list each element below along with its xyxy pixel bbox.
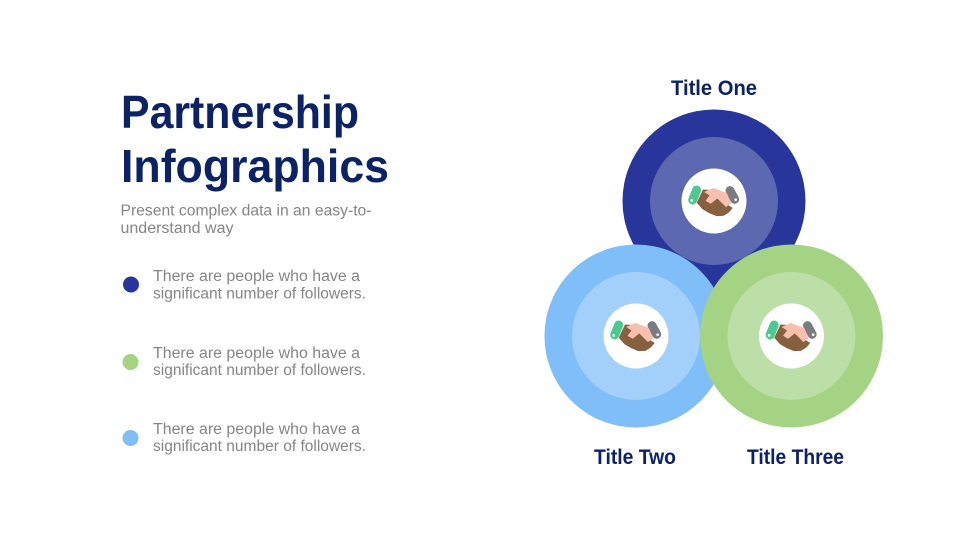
legend item: light blue: [122, 421, 366, 455]
circle two: light blue: [544, 244, 728, 428]
legend item: green: [122, 345, 366, 379]
circle one: dark blue: [622, 110, 806, 292]
legend item: light blue: significant number of followers.: [153, 438, 366, 455]
icon: handshake one: [690, 188, 737, 216]
icon: handshake three: [768, 323, 814, 351]
title: Infographics: [121, 140, 389, 192]
subtitle: Present complex data in an easy-to-: [120, 202, 372, 220]
icon: handshake two: [612, 323, 659, 351]
legend item: green: significant number of followers.: [153, 362, 366, 379]
legend item: dark blue: There are people who have a: [153, 268, 360, 285]
subtitle: [120, 202, 372, 237]
legend item: light blue: There are people who have a: [153, 421, 360, 438]
label: title one: Title One: [671, 77, 757, 100]
label: title two: Title Two: [594, 446, 676, 469]
circle three: green: [700, 244, 883, 428]
label: title three: Title Three: [747, 446, 844, 469]
legend item: green: There are people who have a: [153, 345, 360, 362]
legend item: dark blue: significant number of followers.: [153, 286, 366, 302]
title: Partnership: [121, 86, 359, 138]
title: [121, 86, 389, 192]
subtitle: understand way: [120, 220, 234, 237]
legend item: dark blue: [123, 268, 366, 302]
